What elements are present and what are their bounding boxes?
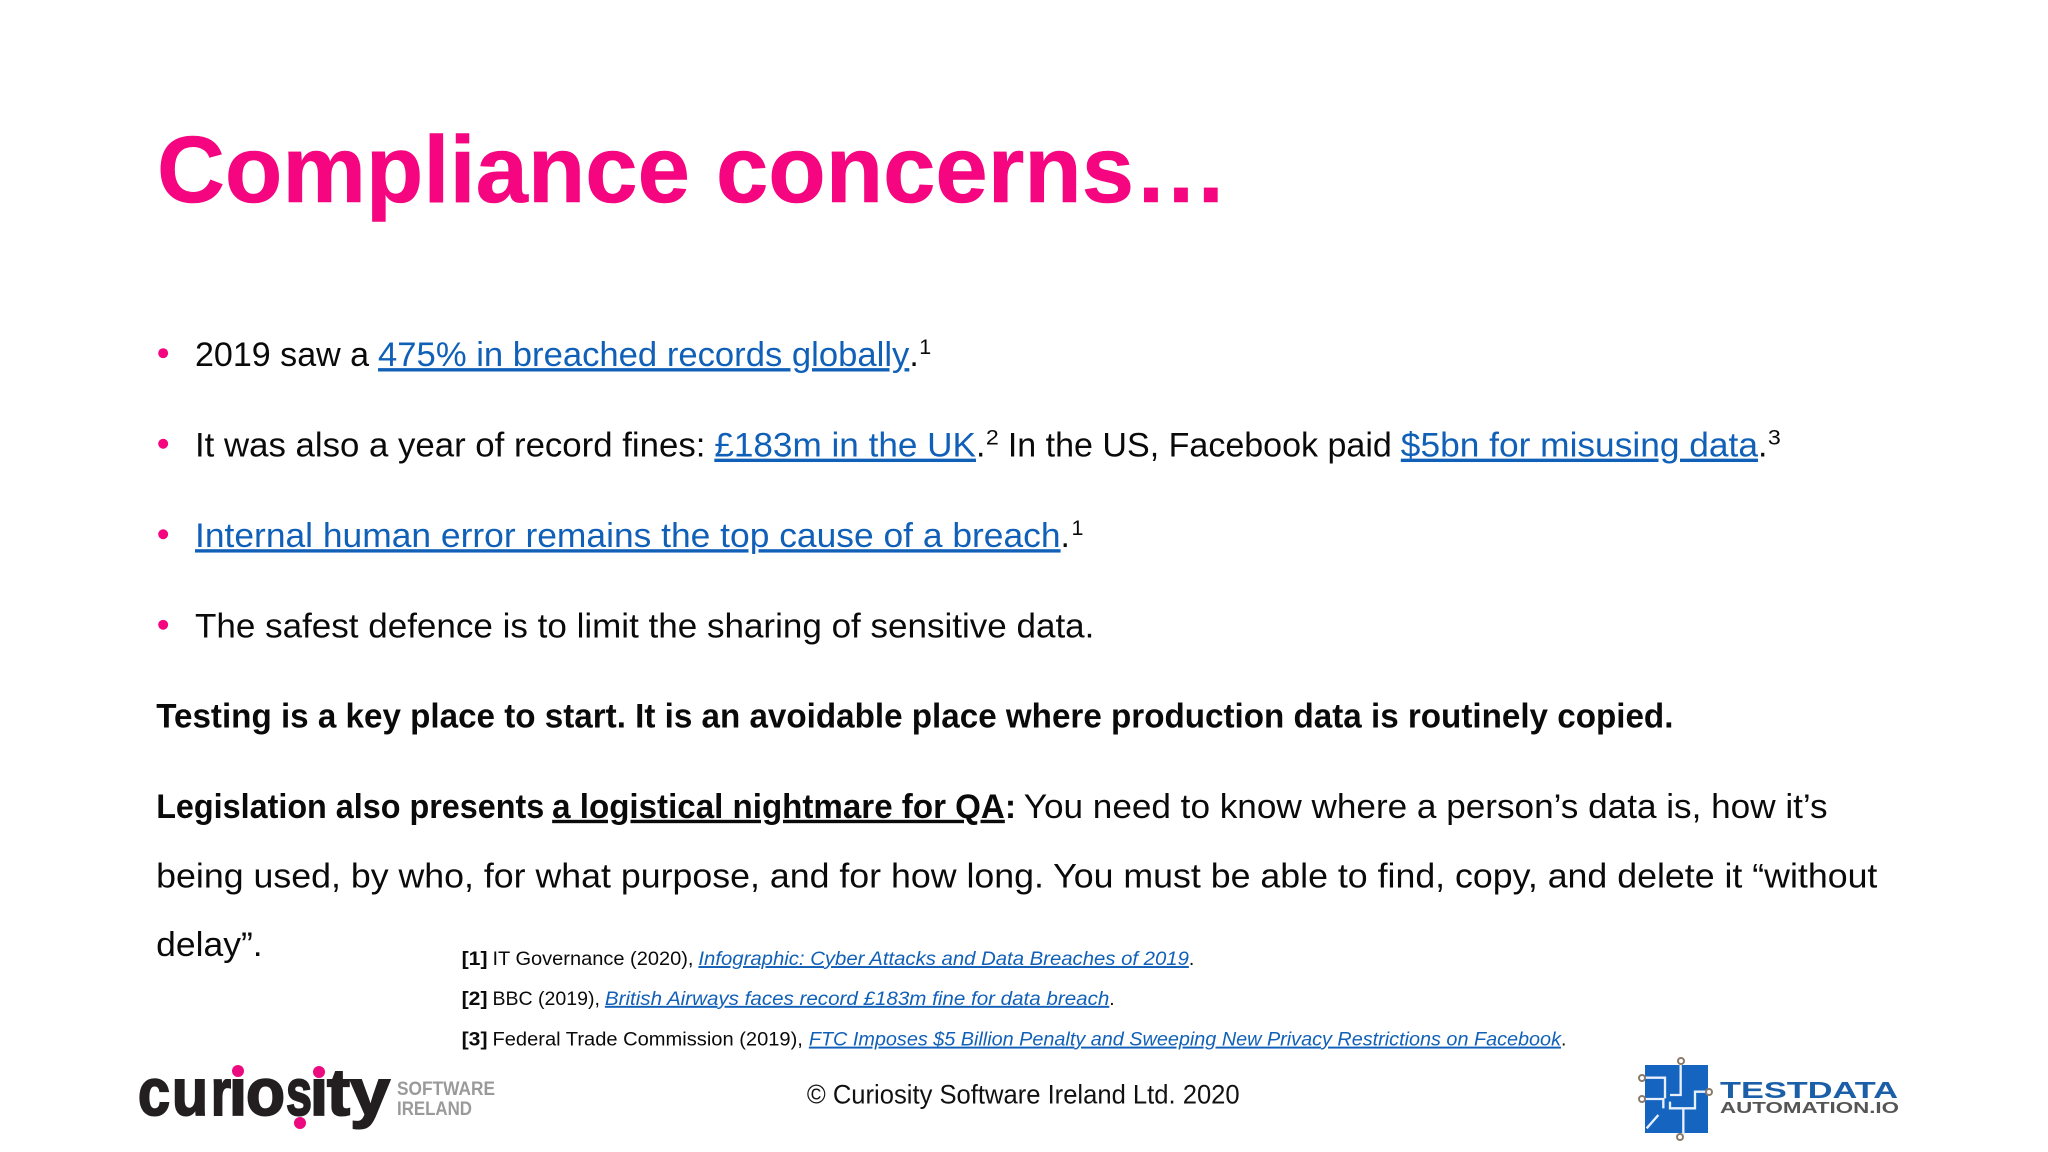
bullet 4: safest defence: The safest defence is to limit the sharing of sensitive data. <box>195 608 1094 646</box>
reference 3: . <box>1561 1029 1566 1051</box>
bullet list <box>158 336 1781 646</box>
reference 3 <box>462 1029 1566 1051</box>
bullet 2: record fines: In the US, Facebook paid <box>1008 427 1392 465</box>
paragraph: legislation: a logistical nightmare for QA <box>552 788 1005 826</box>
logo: test data automation <box>1639 1058 1899 1140</box>
paragraph: legislation: being used, by who, for what purpose, and for how long. You must be able to find, copy, and delete it “without <box>156 857 1878 895</box>
logo: curiosity software ireland <box>138 1055 495 1129</box>
logo: test data automation: TESTDATA <box>1720 1077 1898 1103</box>
reference 1 <box>462 948 1194 970</box>
logo: curiosity software ireland: i <box>310 1055 328 1129</box>
footer copyright: © Curiosity Software Ireland Ltd. 2020 <box>807 1079 1240 1109</box>
logo: curiosity software ireland: c <box>138 1055 170 1129</box>
logo: curiosity software ireland: y <box>350 1055 390 1129</box>
reference 2: [2] <box>462 988 488 1010</box>
bullet 1: breached records: 1 <box>919 336 931 359</box>
bullet 1: breached records <box>158 336 931 374</box>
bold statement: testing: Testing is a key place to start. It is an avoidable place where production data is routinely copied. <box>156 697 1673 735</box>
bullet 1: breached records: . <box>909 336 919 374</box>
bullet 2: record fines: It was also a year of record fines: <box>195 427 705 465</box>
title: Compliance concerns… <box>157 117 1228 223</box>
bullet 1: breached records: 2019 saw a <box>195 336 369 374</box>
paragraph: legislation: delay”. <box>156 926 263 964</box>
logo: curiosity software ireland: o <box>246 1055 285 1129</box>
paragraph: legislation <box>156 788 1878 964</box>
paragraph: legislation: : <box>1005 788 1016 826</box>
bullet 3: human error: Internal human error remains the top cause of a breach <box>195 517 1061 555</box>
logo: curiosity software ireland: u <box>172 1055 208 1129</box>
reference 3: FTC Imposes $5 Billion Penalty and Sweeping New Privacy Restrictions on Facebook <box>809 1029 1562 1051</box>
bullet 1: breached records: 475% in breached records globally <box>378 336 909 374</box>
references <box>462 948 1566 1051</box>
reference 1: . <box>1189 948 1194 970</box>
reference 2: British Airways faces record £183m fine for data breach <box>605 988 1109 1010</box>
paragraph: legislation: Legislation also presents <box>156 788 544 826</box>
logo: curiosity software ireland: SOFTWARE <box>397 1079 495 1100</box>
bullet 2: record fines: 3 <box>1768 427 1781 450</box>
bullet 2: record fines <box>158 427 1781 465</box>
logo: curiosity software ireland: r <box>211 1055 231 1129</box>
reference 3: Federal Trade Commission (2019), <box>492 1029 803 1051</box>
bullet 3: human error: . <box>1061 517 1070 555</box>
logo: curiosity software ireland: t <box>327 1055 350 1129</box>
logo: curiosity software ireland: s <box>286 1055 312 1129</box>
bullet 3: human error: 1 <box>1072 517 1083 540</box>
logo: test data automation: AUTOMATION.IO <box>1720 1100 1899 1117</box>
bullet 2: record fines: £183m in the UK <box>714 427 976 465</box>
reference 3: [3] <box>462 1029 488 1051</box>
bullet 2: record fines: . <box>976 427 985 465</box>
paragraph: legislation: You need to know where a person’s data is, how it’s <box>1024 788 1828 826</box>
reference 1: Infographic: Cyber Attacks and Data Breaches of 2019 <box>698 948 1189 970</box>
reference 2: BBC (2019), <box>492 988 600 1010</box>
logo: curiosity software ireland: i <box>229 1055 247 1129</box>
bullet 2: record fines: $5bn for misusing data <box>1401 427 1758 465</box>
logo: curiosity software ireland: IRELAND <box>397 1099 472 1120</box>
reference 1: [1] <box>462 948 488 970</box>
reference 1: IT Governance (2020), <box>492 948 693 970</box>
reference 2: . <box>1109 988 1115 1010</box>
bullet 2: record fines: . <box>1758 427 1767 465</box>
bullet 2: record fines: 2 <box>986 427 999 450</box>
icon: circuit square <box>1639 1058 1712 1140</box>
